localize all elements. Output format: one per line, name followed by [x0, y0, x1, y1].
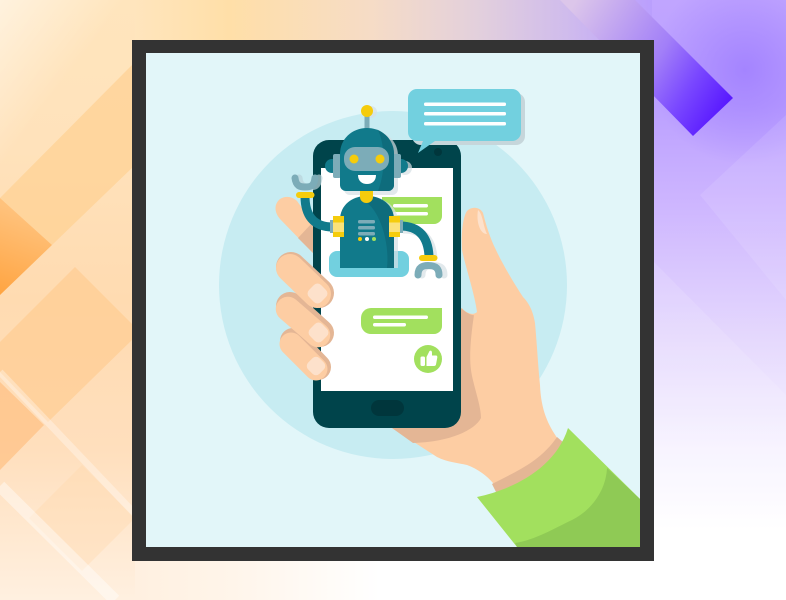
robot left arm — [295, 178, 333, 227]
hand shadow under phone — [392, 308, 481, 443]
green sleeve — [477, 428, 640, 547]
home button — [371, 400, 404, 416]
sleeve shadow — [515, 468, 640, 547]
robot body — [340, 196, 394, 268]
pale blue circle behind phone — [219, 111, 567, 459]
robot eyes — [350, 154, 358, 164]
finger: upper — [290, 267, 330, 306]
wrist shadow — [492, 437, 562, 492]
robot head — [340, 128, 394, 191]
back finger behind phone — [276, 197, 313, 253]
robot smile — [358, 175, 376, 184]
robot chatbot — [295, 105, 444, 277]
dark picture frame — [132, 40, 654, 561]
robot antenna — [361, 105, 373, 129]
robot left shoulder — [330, 216, 344, 237]
robot chest grille — [358, 220, 375, 224]
robot ears — [325, 154, 408, 178]
robot drop shadows — [299, 106, 444, 275]
green chat bubble: upper — [382, 197, 442, 224]
finger: middle — [288, 306, 331, 345]
robot right shoulder — [389, 216, 403, 237]
fingers gripping phone — [288, 267, 331, 377]
robot base on screen — [329, 251, 409, 277]
phone screen — [321, 168, 453, 391]
robot neck — [360, 191, 373, 203]
robot visor — [344, 147, 389, 171]
icon: thumbs up — [414, 345, 442, 373]
finger: lowest — [291, 341, 327, 377]
hand: palm and thumb — [392, 208, 570, 500]
phone camera — [434, 148, 442, 156]
robot chest lights — [358, 237, 362, 241]
thumb nail — [477, 210, 487, 234]
smartphone — [313, 140, 461, 428]
panel: pale blue picture background — [146, 53, 640, 547]
green chat bubble: lower — [361, 308, 442, 334]
robot right arm — [400, 226, 439, 275]
blue speech bubble — [408, 89, 525, 153]
